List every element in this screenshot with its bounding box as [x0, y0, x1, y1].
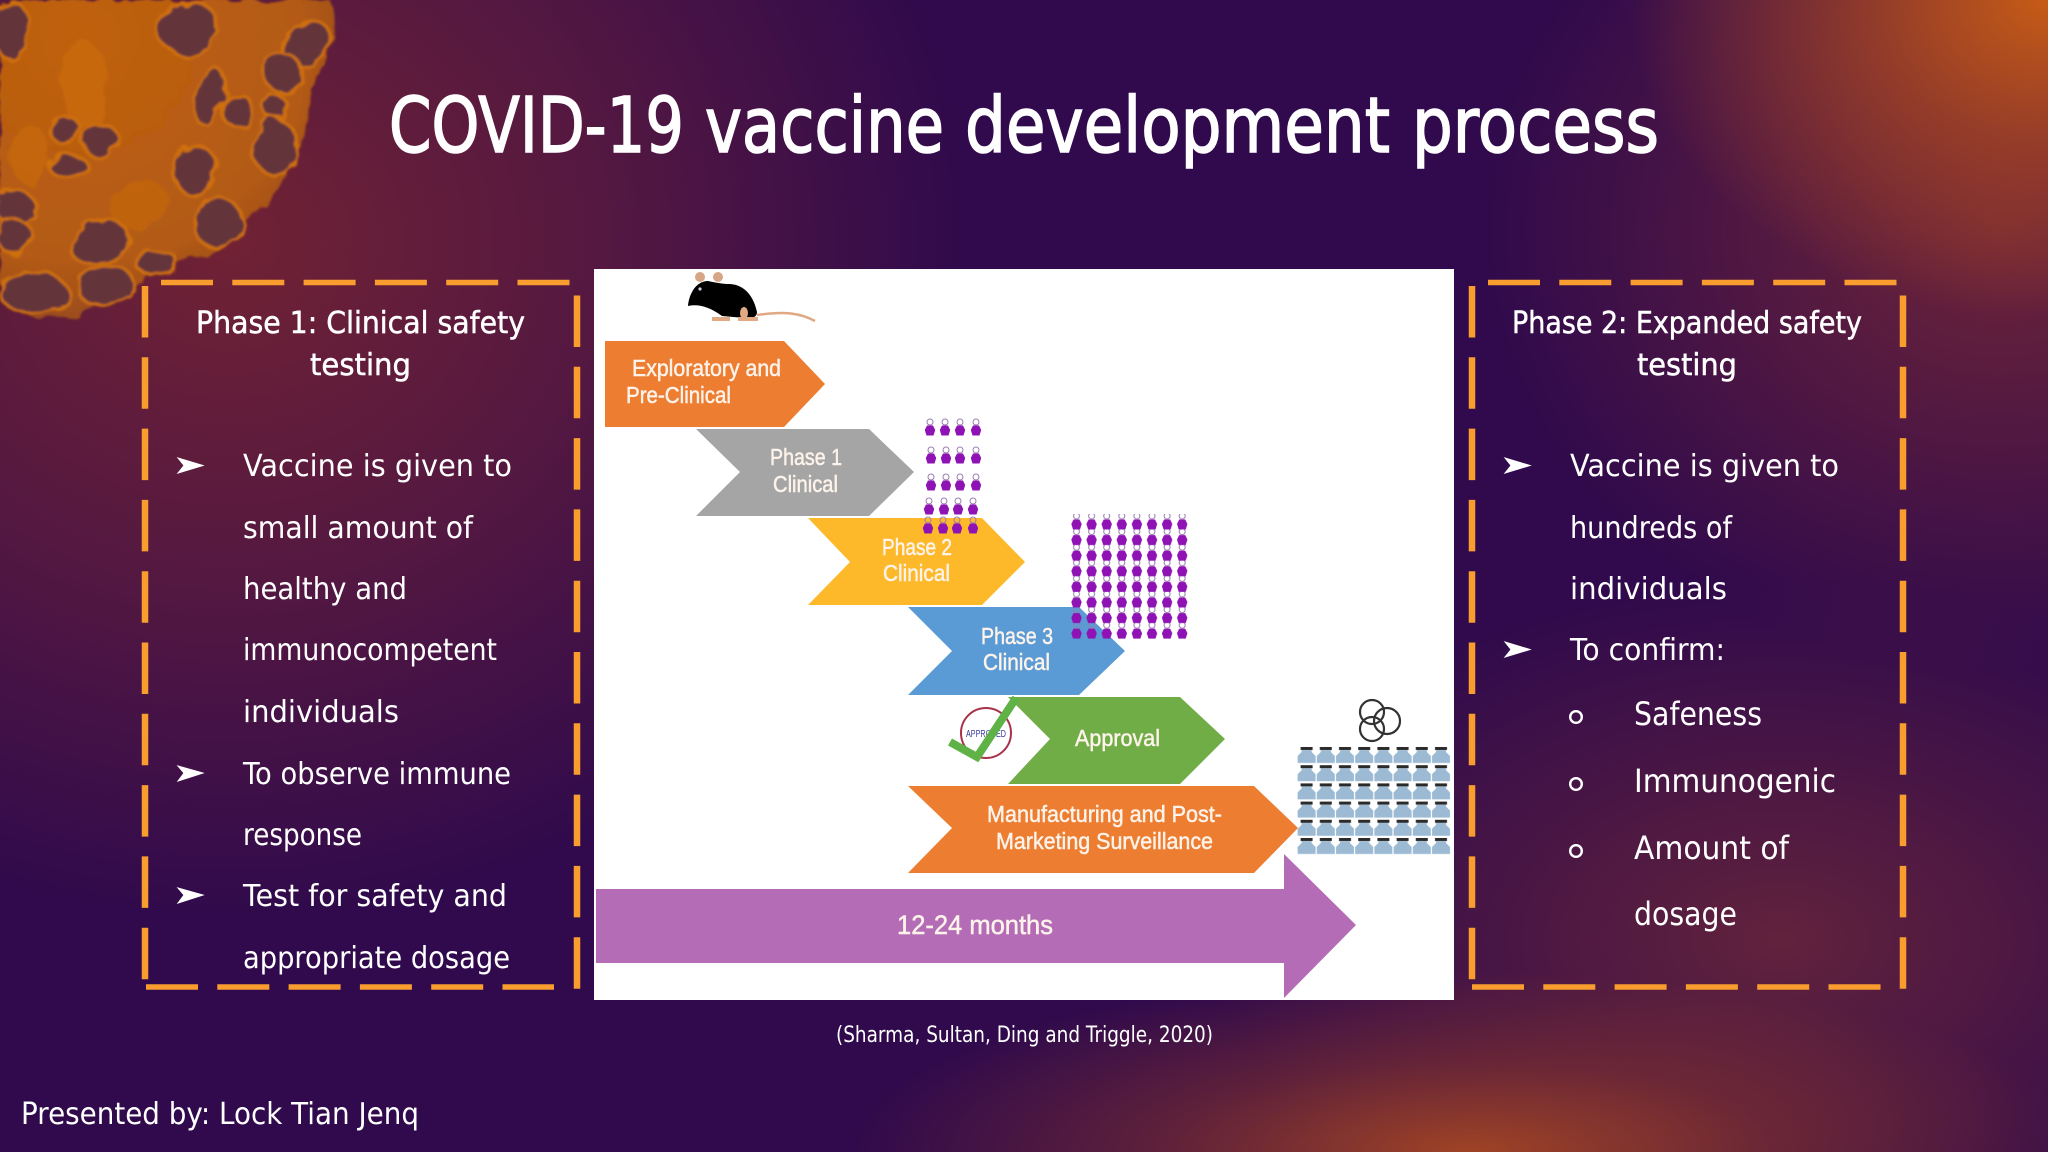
virus illustration [0, 0, 340, 320]
citation: (Sharma, Sultan, Ding and Triggle, 2020) [836, 1023, 1213, 1048]
arrow: manufacturing and post-marketing surveillance [908, 786, 1298, 873]
panel: phase 2 expanded safety testing: dosage [1634, 895, 1737, 933]
arrow: 12-24 months timeline [596, 854, 1356, 998]
icon: mouse [688, 272, 815, 321]
arrow: phase 1 clinical: Phase 1 [770, 444, 842, 470]
title: process [1412, 82, 1659, 171]
arrow: phase 1 clinical: Clinical [773, 471, 838, 497]
icon: phase 1 participants [923, 419, 981, 534]
arrow: phase 2 clinical: Phase 2 [882, 534, 952, 560]
arrow: approval: Approval [1075, 725, 1160, 751]
title: vaccine [705, 82, 944, 171]
arrow: exploratory and pre-clinical: Pre-Clinical [626, 382, 731, 408]
title: COVID-19 [389, 82, 684, 171]
panel: phase 1 clinical safety testing: response [243, 818, 362, 853]
arrow: manufacturing and post-marketing surveillance: Marketing Surveillance [996, 828, 1213, 854]
presenter credit: Presented by: Lock Tian Jenq [21, 1097, 419, 1132]
panel: phase 1 clinical safety testing: healthy and [243, 572, 407, 607]
arrow: phase 3 clinical: Phase 3 [981, 623, 1053, 649]
panel: phase 1 clinical safety testing: individuals [243, 695, 399, 730]
panel: phase 1 clinical safety testing [145, 282, 577, 989]
panel: vaccine timeline diagram [594, 269, 1454, 1000]
arrow: phase 2 clinical [808, 518, 1025, 605]
panel: phase 2 expanded safety testing: individuals [1570, 572, 1727, 607]
panel: phase 1 clinical safety testing: appropriate dosage [243, 941, 510, 976]
icon: phase 2 and 3 participants [1069, 514, 1190, 639]
panel: phase 1 clinical safety testing: Vaccine is given to [243, 449, 512, 484]
panel: phase 2 expanded safety testing: Phase 2: Expanded safety [1512, 306, 1862, 341]
panel: phase 2 expanded safety testing: hundreds of [1570, 511, 1733, 546]
arrow: 12-24 months timeline: 12-24 months [897, 910, 1053, 940]
panel: phase 2 expanded safety testing: To confirm: [1569, 633, 1725, 668]
icon: vaccine vials [1297, 746, 1451, 855]
panel: phase 1 clinical safety testing: testing [310, 348, 411, 383]
title: development [965, 82, 1390, 171]
panel: phase 2 expanded safety testing: Vaccine is given to [1570, 449, 1839, 484]
panel: phase 1 clinical safety testing: immunocompetent [243, 633, 497, 668]
arrow: approval [1008, 697, 1225, 784]
panel: phase 1 clinical safety testing: To observe immune [242, 757, 511, 792]
arrow: phase 3 clinical [908, 607, 1125, 695]
panel: phase 2 expanded safety testing: testing [1637, 348, 1737, 383]
panel: phase 1 clinical safety testing: Test for safety and [242, 879, 507, 914]
panel: phase 2 expanded safety testing: Amount of [1634, 829, 1790, 867]
arrow: phase 2 clinical: Clinical [883, 560, 950, 586]
icon: approved stamp with check mark: APPROVED [966, 729, 1006, 740]
arrow: exploratory and pre-clinical [605, 341, 825, 427]
panel: phase 1 clinical safety testing: small amount of [243, 511, 474, 546]
title [389, 82, 1659, 171]
panel: phase 2 expanded safety testing [1472, 282, 1903, 989]
icon: virus particles [1360, 700, 1400, 741]
panel: phase 1 clinical safety testing: Phase 1: Clinical safety [196, 306, 525, 341]
arrow: phase 3 clinical: Clinical [983, 649, 1050, 675]
arrow: manufacturing and post-marketing surveillance: Manufacturing and Post- [987, 801, 1222, 827]
panel: phase 2 expanded safety testing: Immunogenic [1634, 762, 1836, 800]
panel: phase 2 expanded safety testing: Safeness [1634, 695, 1762, 733]
arrow: exploratory and pre-clinical: Exploratory and [632, 355, 781, 381]
arrow: phase 1 clinical [696, 429, 914, 516]
icon: approved stamp with check mark [950, 698, 1016, 758]
